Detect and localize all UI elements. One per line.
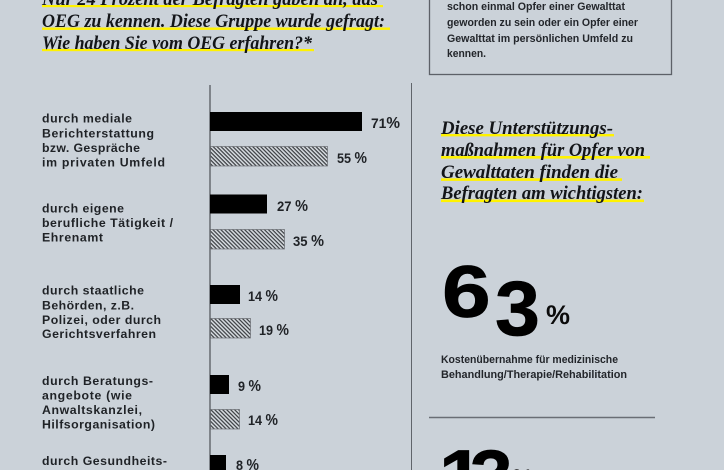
text box: note on victims of violence: geworden zu sein oder ein Opfer einer (447, 17, 639, 29)
row: staatliche Behörden: Behörden, z.B. (42, 298, 134, 312)
heading: OEG question: Wie haben Sie vom OEG erfahren?* (42, 33, 312, 54)
heading: support measures: maßnahmen für Opfer von (441, 140, 645, 161)
heading: support measures (440, 118, 650, 204)
stat description: Kostenübernahme: Kostenübernahme für medizinische (441, 354, 618, 366)
row: mediale Berichterstattung: Berichterstattung (42, 126, 154, 140)
text box: note on victims of violence: Gewalttat im persönlichen Umfeld zu (447, 33, 633, 45)
row: mediale Berichterstattung: durch mediale (42, 112, 132, 126)
row: staatliche Behörden: Gerichtsverfahren (42, 327, 156, 341)
row: staatliche Behörden: 19 % (259, 322, 289, 339)
text box: note on victims of violence: schon einmal Opfer einer Gewalttat (447, 1, 625, 13)
row: mediale Berichterstattung: im privaten Umfeld (42, 156, 165, 170)
stat: 63 percent (442, 252, 570, 352)
text box: note on victims of violence: kennen. (447, 48, 486, 60)
row: mediale Berichterstattung: bzw. Gespräche (42, 141, 140, 155)
row: staatliche Behörden: durch staatliche (42, 284, 144, 298)
row: mediale Berichterstattung: 55 % (337, 150, 367, 167)
row: Beratungsangebote: Hilfsorganisation) (42, 418, 155, 432)
stat: 63 percent: % (546, 300, 570, 330)
row: staatliche Behörden: 14 % (248, 288, 278, 305)
row: staatliche Behörden: Polizei, oder durch (42, 313, 161, 327)
heading: OEG question (41, 0, 390, 54)
row: Beratungsangebote (42, 374, 278, 432)
heading: support measures: Diese Unterstützungs- (440, 118, 613, 139)
row: mediale Berichterstattung (42, 112, 400, 170)
stat description: Kostenübernahme: Behandlung/Therapie/Rehabilitation (441, 369, 627, 381)
bar chart: how respondents learned about the OEG (42, 83, 412, 470)
row: Beratungsangebote: durch Beratungs- (42, 374, 153, 388)
row: Gesundheitswesen (42, 454, 259, 470)
text box: note on victims of violence (430, 0, 672, 74)
stat: 63 percent: 6 (442, 252, 491, 333)
row: Beratungsangebote: 9 % (238, 378, 261, 395)
row: Beratungsangebote: Anwaltskanzlei, (42, 403, 142, 417)
row: staatliche Behörden (42, 284, 289, 341)
stat description: Kostenübernahme (441, 354, 627, 381)
stat: 63 percent: 3 (495, 266, 540, 352)
heading: support measures: Befragten am wichtigsten: (440, 183, 643, 204)
row: Beratungsangebote: angebote (wie (42, 388, 132, 402)
stat: 13 percent (439, 435, 533, 470)
row: berufliche Tätigkeit: durch eigene (42, 202, 124, 216)
row: mediale Berichterstattung: 71% (371, 115, 400, 132)
row: Beratungsangebote: 14 % (248, 412, 278, 429)
heading: OEG question: OEG zu kennen. Diese Gruppe wurde gefragt: (42, 11, 385, 32)
row: berufliche Tätigkeit: 35 % (293, 233, 324, 250)
row: berufliche Tätigkeit: 27 % (277, 198, 308, 215)
row: berufliche Tätigkeit (42, 194, 324, 250)
heading: support measures: Gewalttaten finden die (441, 162, 619, 183)
row: Gesundheitswesen: durch Gesundheits- (42, 454, 167, 468)
row: berufliche Tätigkeit: Ehrenamt (42, 230, 103, 244)
row: berufliche Tätigkeit: berufliche Tätigkeit / (42, 216, 174, 230)
